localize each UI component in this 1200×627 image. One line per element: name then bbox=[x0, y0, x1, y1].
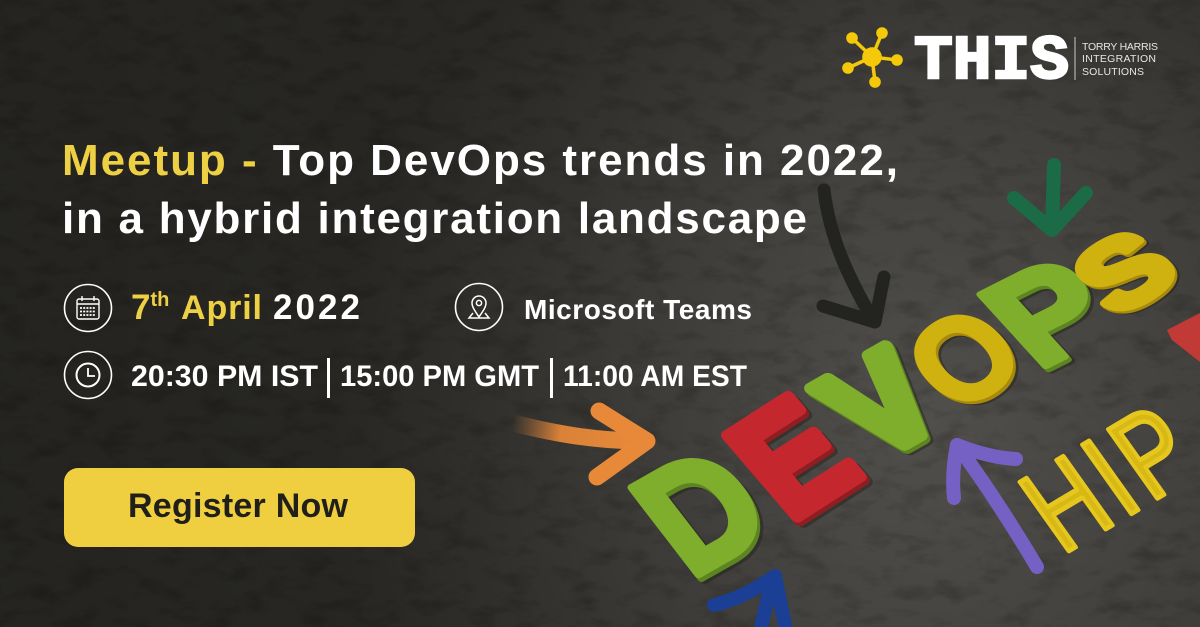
date: day: 7 bbox=[131, 288, 150, 327]
icon: clock bbox=[64, 352, 112, 398]
letter D: D bbox=[602, 415, 799, 606]
logo tagline: TORRY HARRIS bbox=[1082, 41, 1158, 53]
date: month: April bbox=[181, 289, 262, 327]
arrow: green bbox=[1014, 165, 1086, 230]
logo divider bbox=[1074, 37, 1076, 80]
letter O: O bbox=[883, 285, 1057, 440]
letter E: E bbox=[701, 370, 890, 551]
time: EST: 11:00 AM EST bbox=[563, 360, 747, 393]
letter E: E bbox=[697, 366, 887, 547]
logo tagline: SOLUTIONS bbox=[1082, 66, 1144, 78]
letter S: S bbox=[1049, 209, 1199, 334]
letter P: P bbox=[957, 236, 1152, 397]
arrow: purple bbox=[953, 445, 1037, 567]
separator bbox=[550, 358, 553, 398]
icon: map pin bbox=[456, 284, 502, 330]
logo tagline bbox=[1082, 41, 1158, 78]
button: Register Now bbox=[64, 468, 415, 547]
letter V: V bbox=[796, 327, 975, 489]
photo: DEVOPS wooden letters bbox=[602, 209, 1200, 612]
arrow: blue bbox=[714, 576, 786, 627]
title: Meetup - Top DevOps trends in 2022, bbox=[62, 136, 898, 185]
logo: THIS bbox=[842, 26, 1158, 97]
letter S: S bbox=[1051, 211, 1200, 336]
time: IST: 20:30 PM IST bbox=[131, 360, 318, 393]
letter O: O bbox=[880, 284, 1054, 439]
arrow: black bbox=[823, 190, 884, 322]
letter E: E bbox=[704, 372, 893, 552]
title: in a hybrid integration landscape bbox=[62, 194, 807, 243]
letter P: P bbox=[954, 235, 1149, 396]
date row bbox=[64, 284, 360, 332]
separator bbox=[327, 358, 330, 398]
logo wordmark: THIS bbox=[914, 26, 1069, 97]
arrow: orange bbox=[513, 411, 647, 477]
letter V: V bbox=[790, 323, 970, 484]
button: Register Now: Register Now bbox=[128, 487, 349, 525]
title bbox=[62, 136, 898, 243]
letter D: D bbox=[605, 419, 802, 610]
letter V: V bbox=[793, 326, 972, 487]
letter P: P bbox=[951, 232, 1146, 393]
letter D: D bbox=[608, 421, 805, 612]
time row bbox=[64, 352, 747, 398]
arrow: red fragment bbox=[1167, 313, 1200, 362]
location text: Microsoft Teams bbox=[524, 294, 752, 325]
icon: yellow network hub bbox=[842, 27, 903, 88]
letter O: O bbox=[878, 281, 1052, 436]
year: 2022 bbox=[273, 288, 360, 327]
logo tagline: INTEGRATION bbox=[1082, 53, 1156, 65]
icon: calendar bbox=[64, 284, 112, 332]
letter S: S bbox=[1054, 212, 1200, 337]
time: GMT: 15:00 PM GMT bbox=[340, 360, 539, 393]
location row bbox=[456, 284, 752, 330]
date: day: th bbox=[150, 289, 169, 311]
